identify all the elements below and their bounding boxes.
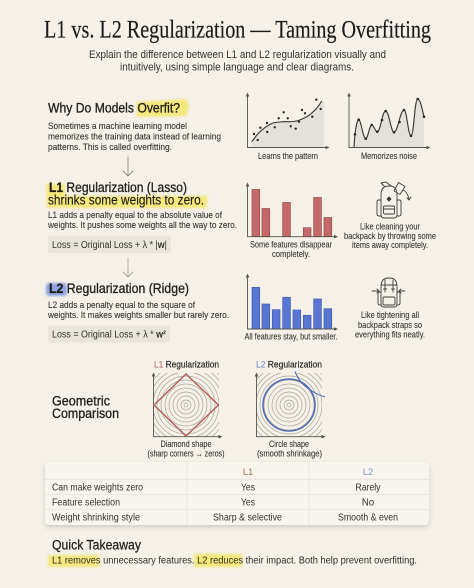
row: can make weights zero: Rarely	[356, 482, 381, 494]
arrow: why to L1	[123, 157, 133, 176]
L2 analogy text: Like tightening all	[361, 310, 419, 320]
subtitle: intuitively, using simple language and clear diagrams.	[120, 62, 354, 74]
caption	[148, 439, 225, 458]
row: can make weights zero: Can make weights zero	[52, 482, 143, 494]
caption	[250, 240, 332, 259]
row: can make weights zero: Yes	[241, 482, 255, 494]
chart: L1 bars	[246, 182, 338, 259]
L2 body: weights. It makes weights smaller but rarely zero.	[47, 309, 229, 320]
caption: Memorizes noise	[361, 151, 417, 161]
icon: backpack with items thrown away	[377, 182, 411, 218]
chart: memorizes noise	[347, 92, 430, 161]
row: weight shrinking style	[52, 512, 398, 524]
L1 formula	[48, 236, 171, 253]
L1 subheading: shrinks some weights to zero.	[48, 192, 204, 208]
row: weight shrinking style: Weight shrinking style	[52, 512, 141, 524]
diagram: L1 diamond	[148, 360, 224, 458]
circle constraint	[263, 379, 315, 431]
arrow: L1 to L2	[123, 258, 133, 277]
L2 analogy text: backpack straps so	[358, 320, 422, 330]
chart: L2 bars	[244, 274, 338, 342]
panel: why do models overfit	[48, 99, 221, 152]
caption: completely.	[272, 249, 310, 259]
contour lines	[257, 373, 322, 436]
chart: learns the pattern	[246, 92, 330, 161]
L2 body: L2 adds a penalty equal to the square of	[48, 299, 195, 310]
L1 highlight	[46, 184, 208, 208]
comparison table: L2	[363, 467, 373, 478]
body text: patterns. This is called overfitting.	[48, 141, 172, 152]
caption: (smooth shrinkage)	[257, 448, 322, 458]
caption: Learns the pattern	[258, 151, 318, 161]
caption: (sharp corners → zeros)	[148, 448, 225, 458]
table header: L1	[243, 467, 253, 478]
L1 analogy text: Like cleaning your	[360, 222, 420, 232]
takeaway highlights	[48, 554, 242, 567]
diagram: L2 circle	[254, 360, 326, 458]
L2 heading: L2 Regularization (Ridge)	[49, 281, 189, 296]
heading: Why Do Models Overfit?	[48, 100, 180, 116]
row: weight shrinking style: Sharp & selective	[213, 512, 282, 524]
body text: Sometimes a machine learning model	[48, 120, 187, 131]
panel: quick takeaway	[48, 538, 417, 567]
L1 analogy text: items away completely.	[352, 240, 428, 250]
caption: Some features disappear	[250, 240, 332, 250]
panel: L2 regularization	[46, 281, 229, 342]
heading: geometric comparison: Comparison	[52, 406, 119, 421]
subtitle	[89, 49, 386, 74]
loss curve	[295, 372, 325, 397]
takeaway heading: Quick Takeaway	[52, 538, 141, 552]
diagram title: L1 Regularization	[154, 360, 219, 370]
L1 analogy text	[344, 222, 436, 250]
L2 formula	[48, 326, 170, 342]
L1 formula: Loss = Original Loss + λ * |w|	[52, 240, 167, 251]
diagram title: L2 Regularization	[256, 360, 322, 370]
heading highlight	[136, 99, 189, 117]
L1 body	[47, 209, 237, 230]
icon: backpack with tightened straps	[372, 278, 405, 307]
L1 heading: L1 Regularization (Lasso)	[49, 180, 187, 195]
L2 formula: Loss = Original Loss + λ * w²	[52, 330, 167, 340]
row: feature selection: Feature selection	[52, 498, 120, 508]
row: feature selection: No	[362, 498, 375, 508]
L1 analogy text: backpack by throwing some	[344, 231, 436, 241]
caption	[257, 439, 322, 458]
L2 analogy text: everything fits neatly.	[355, 330, 425, 340]
diamond constraint	[154, 374, 218, 436]
row: feature selection	[52, 498, 375, 508]
comparison table	[45, 462, 429, 525]
row: weight shrinking style: Smooth & even	[338, 512, 398, 524]
caption: All features stay, but smaller.	[244, 332, 338, 342]
L1 body: weights. It pushes some weights all the way to zero.	[47, 219, 237, 230]
caption: Circle shape	[269, 439, 309, 449]
heading: geometric comparison: Geometric	[52, 394, 110, 408]
row: feature selection: Yes	[241, 498, 255, 508]
heading: geometric comparison	[52, 394, 119, 421]
body text: memorizes the training data instead of learning	[48, 130, 221, 142]
L1 body: L1 adds a penalty equal to the absolute value of	[48, 209, 222, 220]
L2 body	[47, 299, 229, 320]
contour lines	[154, 373, 219, 436]
L2 analogy text	[355, 310, 425, 340]
takeaway text: L1 removes unnecessary features. L2 reduces their impact. Both help prevent overfitting.	[52, 556, 417, 566]
caption: Diamond shape	[160, 439, 212, 449]
panel: L1 regularization	[46, 180, 237, 253]
body text	[48, 120, 221, 152]
subtitle: Explain the difference between L1 and L2 regularization visually and	[89, 49, 386, 61]
L2 highlight	[46, 283, 67, 296]
row: can make weights zero	[52, 482, 381, 494]
